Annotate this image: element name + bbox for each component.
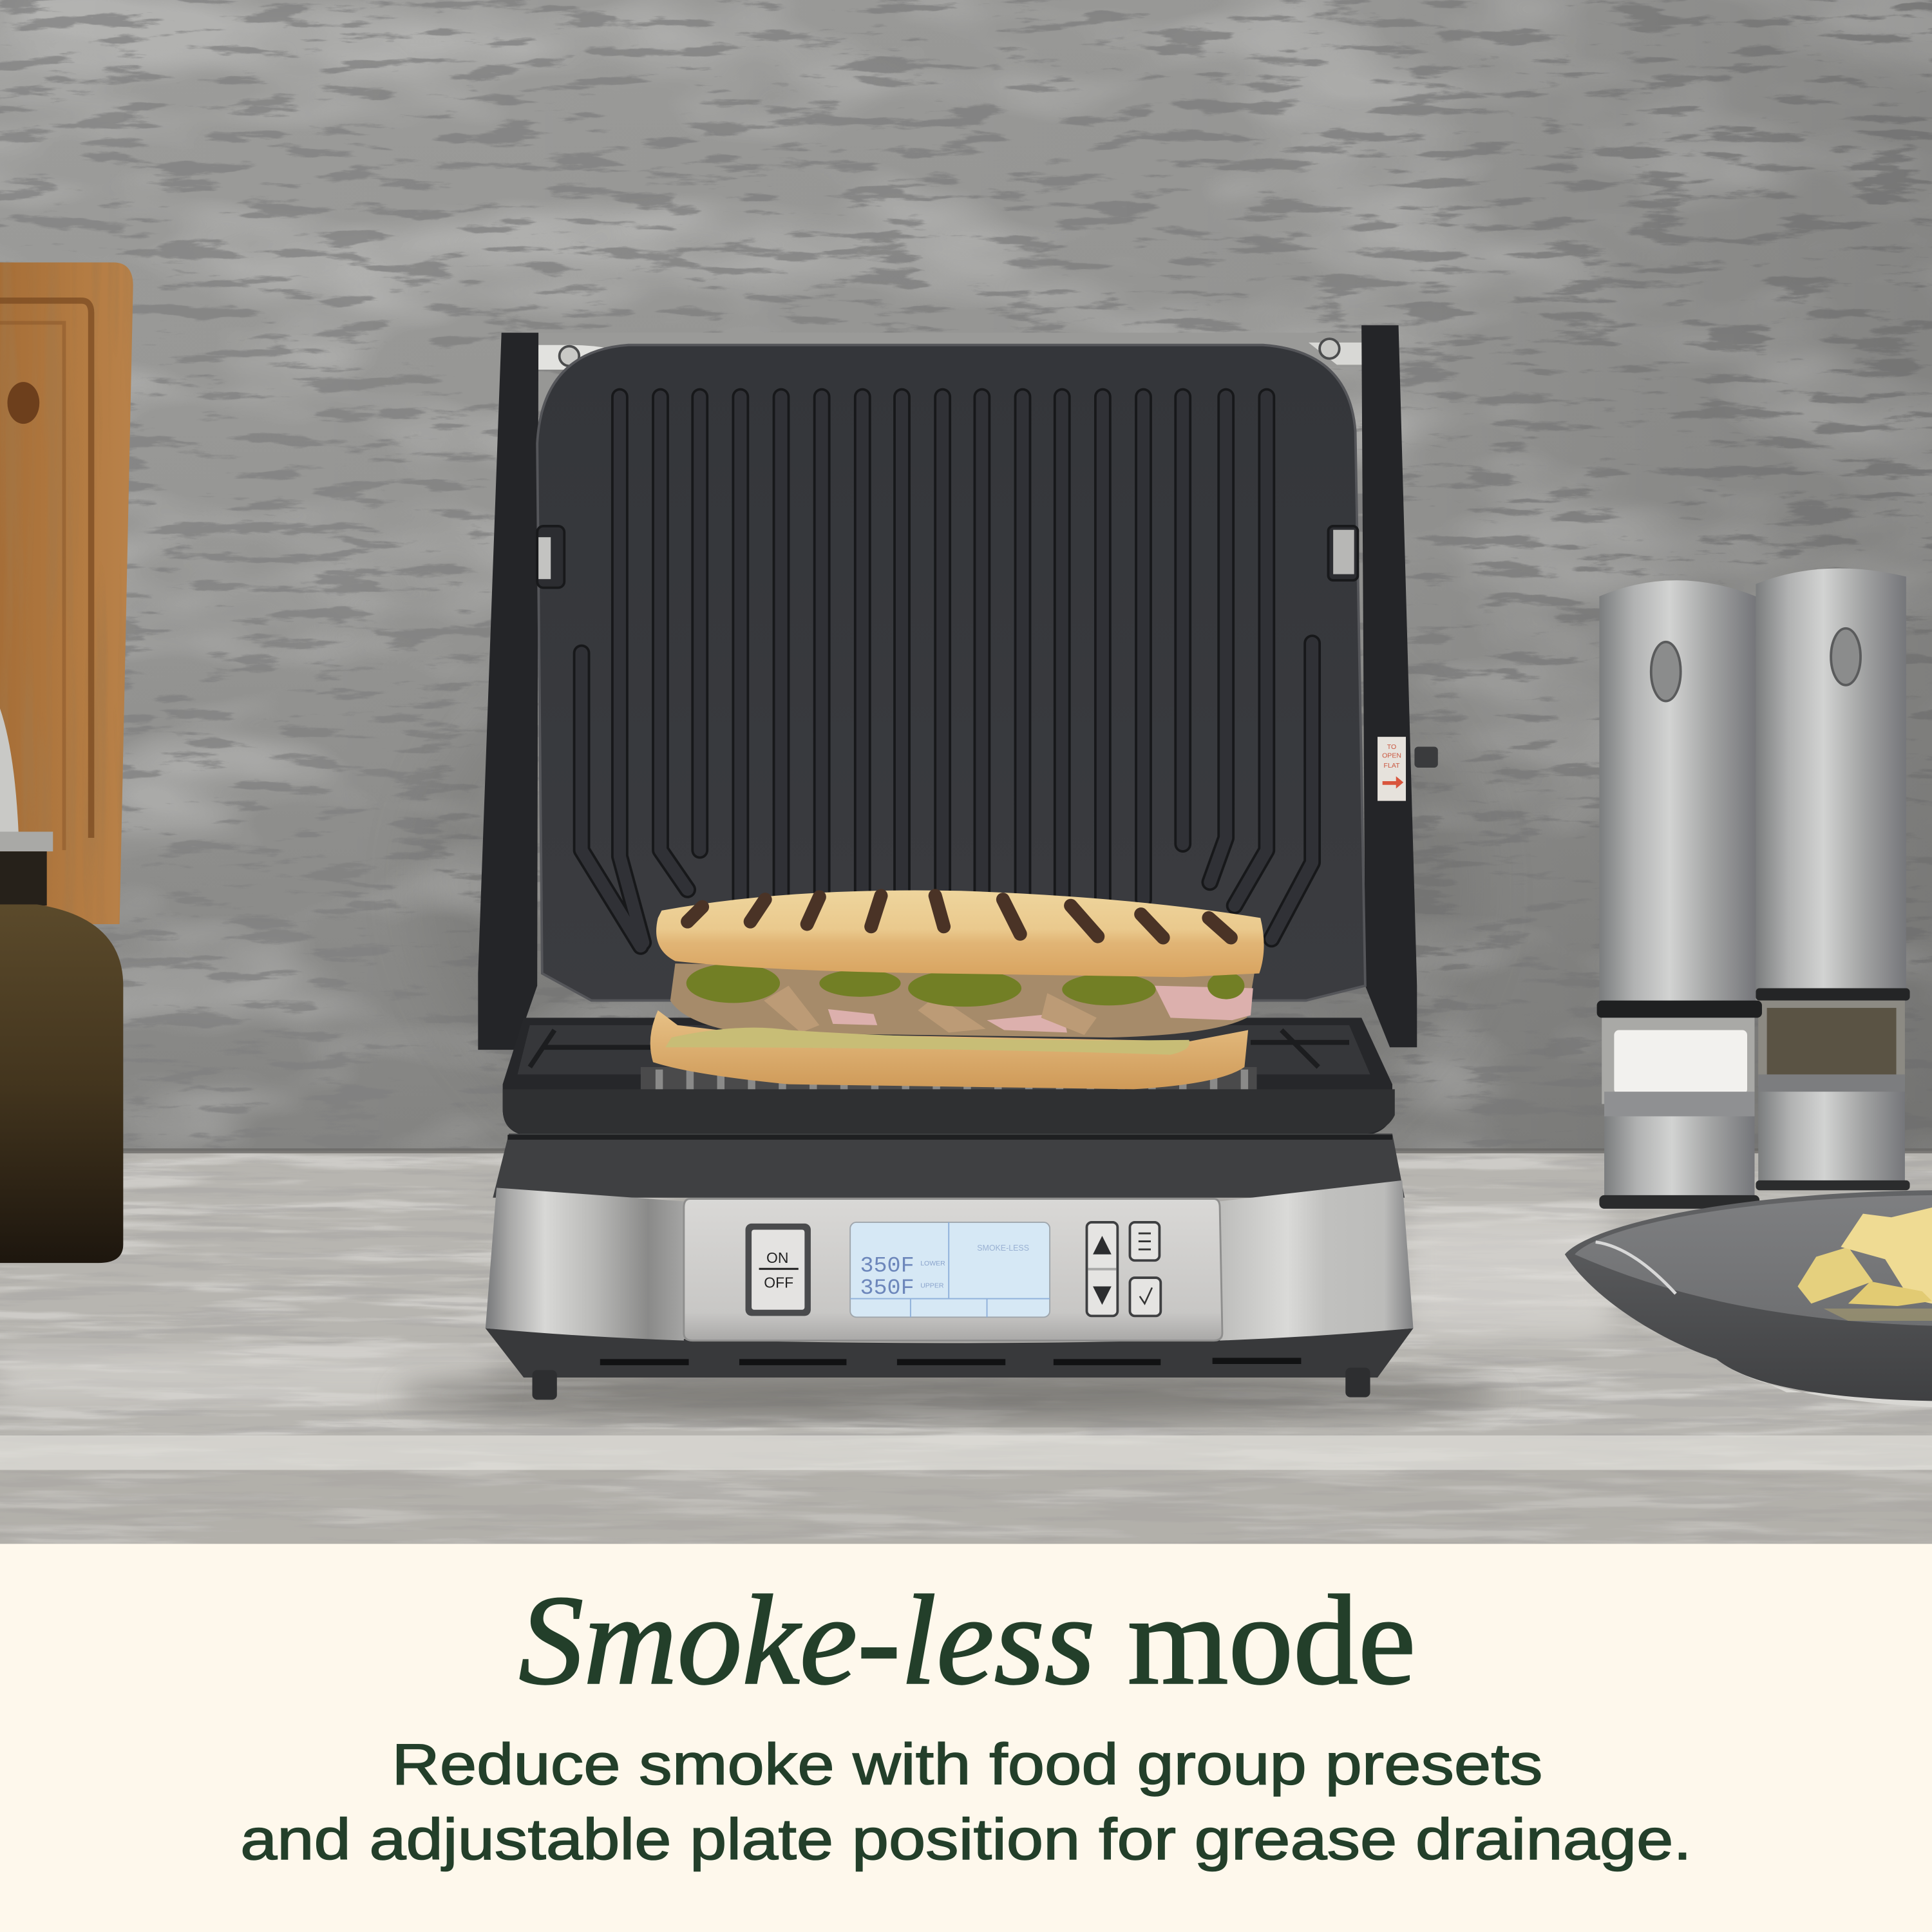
bottom bread: [650, 1010, 1248, 1089]
chips: [1797, 1208, 1932, 1321]
scene photo: [0, 0, 1932, 1545]
pickles: [687, 963, 1244, 1007]
pepper mill: right: [1756, 569, 1910, 1190]
warning label: FLAT: [1384, 762, 1400, 770]
steel body left: [486, 1188, 684, 1341]
grill shadow: [419, 542, 1479, 1232]
confirm button: [1130, 1278, 1160, 1316]
on off button: OFF: [764, 1274, 793, 1291]
filling: [665, 963, 1255, 1055]
lcd display: 350F: [860, 1253, 914, 1278]
menu button: [1130, 1222, 1159, 1260]
cutting board: [0, 263, 135, 928]
warning label: TO: [1387, 743, 1396, 751]
warning label: [1378, 737, 1406, 801]
dark vent base: [486, 1328, 1414, 1399]
on off button: [746, 1224, 811, 1316]
top bread: [656, 891, 1264, 977]
lower cooking plate: [503, 1018, 1395, 1136]
lcd display: 350F: [860, 1276, 914, 1301]
hinge bar: [503, 333, 1365, 370]
plate latches: [537, 526, 1358, 588]
contact grill: [478, 325, 1438, 1399]
pepper mill: left: [1597, 580, 1762, 1209]
left arm: [478, 333, 538, 1050]
upper plate ridges: [582, 397, 1312, 946]
panini sandwich: [650, 891, 1264, 1089]
right arm: [1361, 325, 1417, 1047]
knob: [1414, 746, 1438, 768]
grill marks: [688, 896, 1231, 938]
oil bottle: [0, 708, 123, 1263]
warning label: OPEN: [1382, 752, 1401, 760]
heading: Smoke-less mode: [518, 1570, 1416, 1712]
plate with chips: [1565, 1190, 1932, 1407]
on off button: ON: [766, 1249, 788, 1266]
lcd display: UPPER: [920, 1282, 944, 1289]
steel body right: [1220, 1180, 1414, 1341]
lcd display: SMOKE-LESS: [977, 1244, 1029, 1253]
concrete wall: [0, 0, 1932, 1153]
base shoulder: [493, 1133, 1405, 1198]
lcd display: LOWER: [920, 1260, 945, 1267]
body line 1: Reduce smoke with food group presets: [392, 1732, 1542, 1797]
up down button: [1087, 1222, 1117, 1316]
upper cooking plate: [537, 345, 1365, 1001]
control panel: [684, 1199, 1222, 1341]
body line 2: and adjustable plate position for grease drainage.: [240, 1808, 1692, 1872]
lcd display: [850, 1222, 1050, 1317]
caption panel: [0, 1544, 1932, 1932]
marble countertop: [0, 1148, 1932, 1545]
